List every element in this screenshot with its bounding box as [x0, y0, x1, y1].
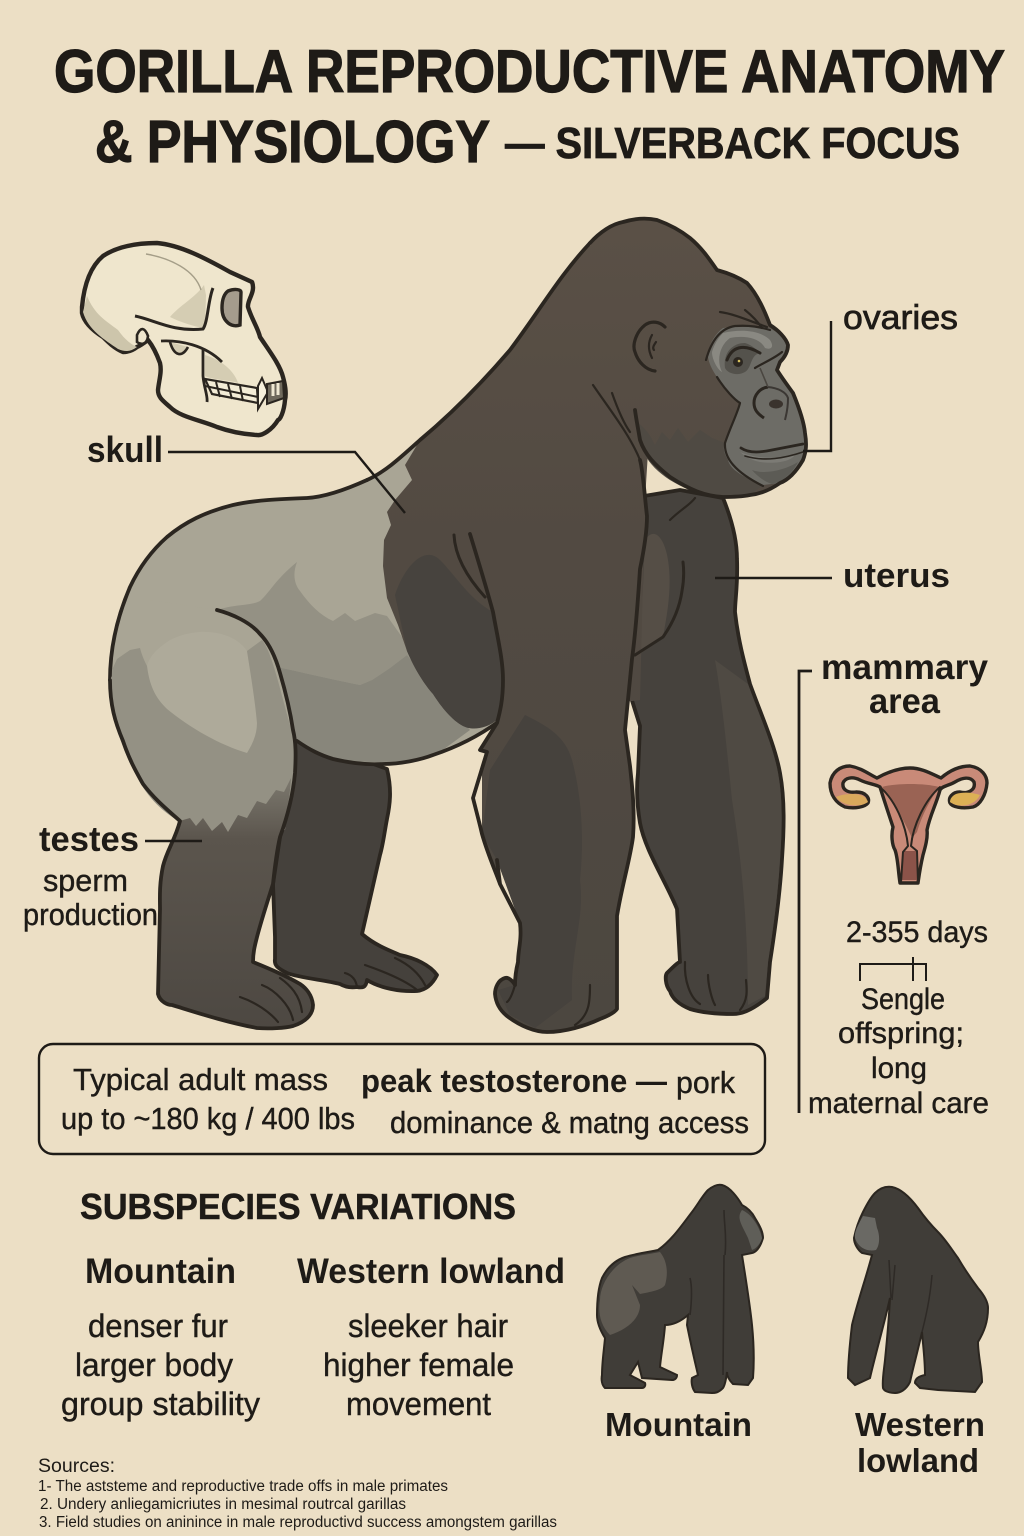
head	[590, 219, 806, 497]
neck shadow	[635, 420, 763, 496]
chest line	[635, 562, 684, 655]
sources: 1- The aststeme and reproductive trade offs in male primates	[38, 1478, 448, 1495]
text: single offspring: maternal care	[808, 1087, 989, 1120]
column: western lowland: Western lowland	[297, 1252, 565, 1291]
caption: western lowland: lowland	[857, 1442, 979, 1479]
belly outline	[297, 722, 498, 764]
callout: mass and testosterone	[39, 1044, 765, 1154]
callout: mass and testosterone: up to ~180 kg / 400 lbs	[61, 1101, 355, 1136]
chin shade	[752, 462, 798, 484]
face lines	[706, 326, 770, 360]
near hind leg	[110, 600, 296, 840]
far front arm	[620, 490, 784, 1014]
eye	[725, 343, 782, 374]
upper body dark	[383, 243, 660, 727]
icon: uterus and ovaries	[830, 766, 987, 883]
face light	[708, 327, 806, 485]
callout: mass and testosterone: pork	[676, 1065, 735, 1100]
text: single offspring	[808, 983, 989, 1120]
title: & PHYSIOLOGY	[95, 109, 490, 175]
shoulder line	[454, 535, 485, 597]
head outline	[590, 219, 806, 497]
title: — SILVERBACK FOCUS	[505, 119, 960, 168]
neck lines	[593, 385, 640, 460]
label: testes: testes	[39, 820, 139, 859]
icon: mountain gorilla	[597, 1185, 763, 1393]
label: mammary area with bracket: area	[869, 682, 941, 721]
label: testes: sperm	[43, 863, 128, 898]
column: western lowland: higher female	[323, 1347, 514, 1383]
label: testes	[23, 820, 202, 932]
thigh highlight	[147, 632, 257, 753]
column: mountain: group stability	[61, 1386, 260, 1422]
caption: western lowland: Western	[855, 1406, 985, 1443]
column: western lowland: sleeker hair	[348, 1308, 508, 1344]
chest patch	[640, 534, 670, 654]
column: mountain: Mountain	[85, 1252, 236, 1291]
label: skull with leader line	[87, 429, 405, 513]
illustration: silverback gorilla	[110, 219, 806, 1032]
column: mountain: denser fur	[88, 1308, 228, 1344]
label: skull with leader line: skull	[87, 429, 163, 470]
column: western lowland	[297, 1252, 565, 1422]
caption: western lowland	[855, 1406, 985, 1479]
hand lines	[685, 962, 747, 1010]
near leg outline	[110, 610, 313, 1028]
rump outline	[110, 480, 367, 680]
nose	[754, 368, 788, 420]
column: western lowland: movement	[346, 1386, 491, 1422]
torso shading: mid band	[217, 562, 440, 690]
belly dark shade	[395, 555, 503, 728]
callout: mass and testosterone: Typical adult mass	[73, 1062, 328, 1097]
sources: 2. Undery anliegamicriutes in mesimal routrcal garillas	[40, 1496, 406, 1513]
label: uterus with leader line: uterus	[843, 557, 950, 595]
lip highlight	[740, 452, 795, 463]
sources: 3. Field studies on aninince in male reproductivd success amongstem garillas	[39, 1514, 557, 1531]
near front arm	[470, 400, 647, 1032]
column: mountain	[61, 1252, 260, 1422]
icon detail: teeth	[205, 378, 284, 409]
torso shading: belly	[273, 655, 470, 762]
far hind leg	[273, 735, 437, 991]
brow highlight	[712, 331, 772, 372]
text: single offspring: long	[871, 1052, 927, 1085]
back outline	[367, 243, 590, 480]
near leg mid shading	[112, 640, 295, 840]
sources	[38, 1456, 557, 1531]
mouth	[741, 444, 803, 452]
heading: subspecies variations: SUBSPECIES VARIATIONS	[80, 1186, 516, 1227]
label: ovaries with bracket: ovaries	[843, 299, 958, 337]
label: mammary area with bracket	[799, 648, 989, 1113]
callout: mass and testosterone: peak testosterone —	[361, 1063, 667, 1099]
text: single offspring: Sengle	[861, 983, 945, 1016]
toe lines	[240, 978, 302, 1022]
column: mountain: larger body	[75, 1347, 233, 1383]
far arm highlight	[715, 660, 782, 1005]
ear	[634, 322, 665, 371]
label: testes: production	[23, 897, 158, 932]
label: ovaries with bracket	[803, 299, 958, 451]
callout: mass and testosterone: dominance & matng access	[390, 1105, 749, 1140]
icon: gorilla skull	[82, 243, 286, 435]
label: mammary area with bracket: mammary	[821, 648, 989, 687]
caption: mountain: Mountain	[605, 1406, 752, 1443]
icon: western lowland gorilla	[848, 1187, 988, 1393]
near leg dark lower	[158, 778, 313, 1028]
near arm shadow	[482, 715, 582, 1028]
sources: Sources:	[38, 1456, 115, 1477]
gestation: 2-355 days: 2-355 days	[846, 916, 988, 949]
gestation: 2-355 days	[846, 916, 988, 981]
near arm outline	[470, 460, 647, 1032]
torso and rump	[110, 440, 503, 821]
text: single offspring: offspring;	[838, 1017, 964, 1050]
title	[54, 38, 1005, 175]
